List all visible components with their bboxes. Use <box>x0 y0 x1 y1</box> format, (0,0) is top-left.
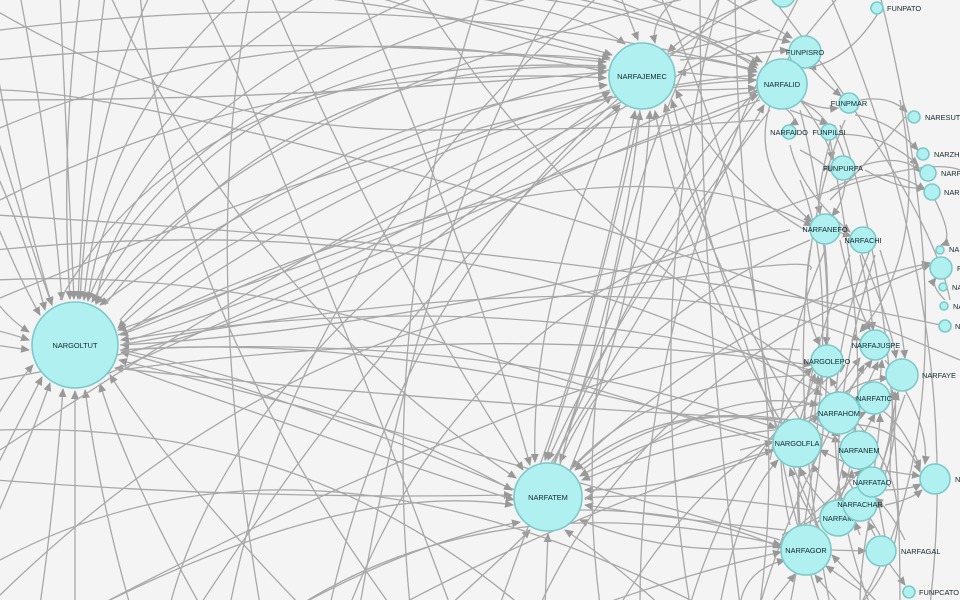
node: NARFATEM <box>514 463 582 531</box>
node: NAR: NAR <box>944 188 960 197</box>
node: NA 1 <box>936 245 959 254</box>
node: NARFALID <box>757 59 807 109</box>
node: NARFATAQ: NARFATAQ <box>853 478 892 487</box>
node: top clipped <box>771 0 795 7</box>
node: FUNPISRO: FUNPISRO <box>786 48 824 57</box>
node: NARFAYE <box>886 359 956 391</box>
node: NARGOLEPO <box>804 345 851 377</box>
node: FUNPMAR <box>831 93 867 113</box>
node: FUNPATO: FUNPATO <box>887 4 921 13</box>
node: NARFALID: NARFALID <box>764 80 800 89</box>
node: NARFAM <box>820 500 856 536</box>
node: FUNPURFA: FUNPURFA <box>823 164 863 173</box>
node: FUNPURFA <box>823 156 863 180</box>
node: NARFANEFO <box>802 214 848 244</box>
node: NARFAJEMEC <box>609 43 675 109</box>
node: N <box>939 320 960 332</box>
node: NARFATIC <box>856 382 893 414</box>
edges into NARFALID and FUNPISRO <box>0 0 792 465</box>
node: NARESUT: NARESUT <box>925 113 960 122</box>
node: NARFAGAL: NARFAGAL <box>901 547 940 556</box>
node: NARFAJUSPE: NARFAJUSPE <box>852 341 900 350</box>
node: FUNPILSI: FUNPILSI <box>812 128 846 137</box>
node: NARESUT <box>908 111 960 123</box>
node: FUNPATO <box>871 2 921 14</box>
node: NARFAIDO: NARFAIDO <box>770 128 808 137</box>
node: NARFACHAR <box>837 487 883 521</box>
node: NARFAHOM <box>818 392 860 434</box>
node: NARFAYE: NARFAYE <box>922 371 956 380</box>
node: NARF <box>920 165 960 181</box>
node: NARFAIDO <box>770 125 808 139</box>
node: FUNPISRO <box>786 36 824 68</box>
node: NA 2 <box>939 283 960 292</box>
node: FUNPMAR: FUNPMAR <box>831 99 867 108</box>
node: NARFAGOR: NARFAGOR <box>785 546 827 555</box>
node: NARFATAQ <box>853 467 892 497</box>
node: NARFATEM: NARFATEM <box>528 493 568 502</box>
node: FUNPCATO <box>903 586 959 598</box>
node: NARFAJUSPE <box>852 330 900 360</box>
node: NARFANEM <box>838 431 880 469</box>
node: NAR <box>924 184 960 200</box>
node: NARFAM: NARFAM <box>823 514 853 523</box>
node: NARGOLEPO: NARGOLEPO <box>804 357 851 366</box>
node: F <box>930 257 960 279</box>
node: NARFAGAL <box>866 536 940 566</box>
node: FUNPCATO: FUNPCATO <box>919 588 959 597</box>
node: NARFACHI <box>844 227 882 253</box>
node: NARFACHAR: NARFACHAR <box>837 500 883 509</box>
node: NARZH <box>917 148 959 160</box>
node: NARFAJEMEC: NARFAJEMEC <box>617 72 667 81</box>
node: NA 1: NA <box>949 245 959 254</box>
node: NARGOLTUT <box>32 302 118 388</box>
node: NARZH: NARZH <box>934 150 959 159</box>
node: NARFACHI: NARFACHI <box>844 236 882 245</box>
node: FUNPILSI <box>812 124 846 140</box>
node: NARGOLTUT: NARGOLTUT <box>52 341 98 350</box>
node: NARGOLFLA: NARGOLFLA <box>775 439 819 448</box>
node: NARFAHOM: NARFAHOM <box>818 409 860 418</box>
node: NARFATIC: NARFATIC <box>856 394 893 403</box>
node: N right <box>920 464 960 494</box>
node: NARFAGOR <box>781 525 831 575</box>
node: NARFANEFO: NARFANEFO <box>802 225 848 234</box>
node: NARFANEM: NARFANEM <box>838 446 880 455</box>
node: NARGOLFLA <box>773 419 821 467</box>
node: NA 3 <box>940 302 960 311</box>
